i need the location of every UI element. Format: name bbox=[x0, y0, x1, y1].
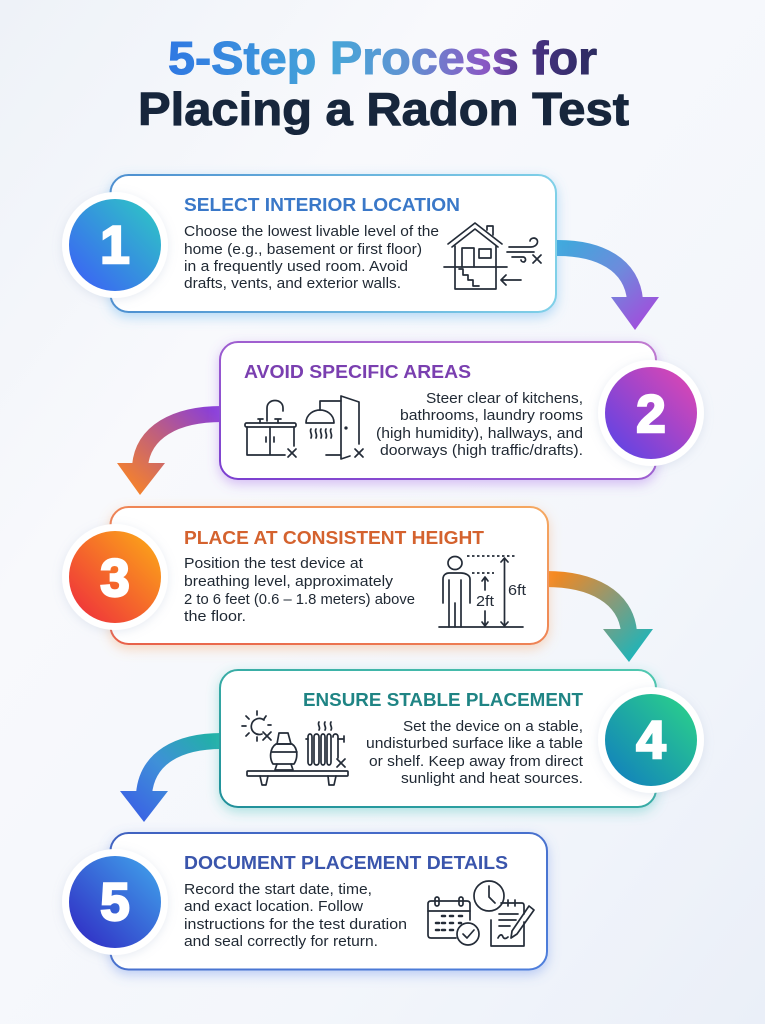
heading: avoid specific areas: AVOID SPECIFIC AREAS bbox=[244, 361, 471, 382]
text: step 1 description: drafts, vents, and exterior walls. bbox=[184, 275, 401, 292]
heading: place at consistent height: PLACE AT CONSISTENT HEIGHT bbox=[184, 527, 485, 548]
panel: step 3 bbox=[62, 507, 548, 644]
title: Placing a Radon Test bbox=[138, 83, 629, 135]
title: 5-Step Process for bbox=[168, 32, 597, 84]
text: step 1 description bbox=[184, 223, 439, 292]
text: step 1 description: in a frequently used room. Avoid bbox=[184, 258, 408, 275]
text: step 4 description: undisturbed surface like a table bbox=[366, 735, 583, 752]
text: step 5 description: instructions for the test duration bbox=[184, 916, 407, 933]
icon: calendar, clock and clipboard bbox=[428, 881, 534, 946]
text: step 5 description: and exact location. Follow bbox=[184, 898, 363, 915]
text: step 5 description: and seal correctly for return. bbox=[184, 933, 378, 950]
panel: step 2 bbox=[220, 342, 704, 479]
text: step 2 description: doorways (high traffic/drafts). bbox=[380, 442, 583, 459]
panel: step 4 bbox=[220, 670, 704, 807]
text: step 4 description bbox=[366, 718, 584, 787]
heading: select interior location: SELECT INTERIOR LOCATION bbox=[184, 194, 460, 215]
text: step 4 description: Set the device on a stable, bbox=[403, 718, 583, 735]
number badge 1: 1 bbox=[100, 216, 130, 275]
number badge 3: 3 bbox=[100, 549, 130, 608]
text: step 3 description bbox=[184, 555, 415, 625]
text: step 4 description: or shelf. Keep away from direct bbox=[369, 753, 584, 770]
number badge 5: 5 bbox=[100, 873, 130, 932]
arrow: step 1 to 2 bbox=[554, 248, 659, 330]
text: step 3 description: the floor. bbox=[184, 608, 246, 625]
icon: person with height markers: 2ft bbox=[476, 594, 494, 610]
number badge 2 bbox=[598, 360, 704, 466]
arrow: step 3 to 4 bbox=[546, 579, 653, 662]
number badge 4: 4 bbox=[636, 711, 666, 770]
icon: person with height markers bbox=[439, 556, 526, 627]
text: step 2 description: (high humidity), hallways, and bbox=[376, 425, 583, 442]
panel: step 5 bbox=[62, 833, 547, 970]
arrow: step 4 to 5 bbox=[120, 741, 222, 822]
text: step 2 description bbox=[376, 390, 583, 459]
text: step 4 description: sunlight and heat sources. bbox=[401, 770, 583, 787]
heading: ensure stable placement: ENSURE STABLE PLACEMENT bbox=[303, 689, 584, 710]
panel: step 1 bbox=[62, 175, 556, 312]
text: step 5 description: Record the start date, time, bbox=[184, 881, 372, 898]
number badge 4 bbox=[598, 687, 704, 793]
text: step 2 description: bathrooms, laundry rooms bbox=[400, 407, 583, 424]
title bbox=[138, 32, 629, 135]
text: step 1 description: home (e.g., basement or first floor) bbox=[184, 241, 422, 258]
number badge 5 bbox=[62, 849, 168, 955]
heading: document placement details: DOCUMENT PLACEMENT DETAILS bbox=[184, 852, 508, 873]
icon: person with height markers: 6ft bbox=[508, 583, 526, 599]
text: step 3 description: 2 to 6 feet (0.6 – 1.8 meters) above bbox=[184, 591, 415, 608]
number badge 1 bbox=[62, 192, 168, 298]
icon: house with basement and drafts bbox=[444, 223, 541, 289]
number badge 3 bbox=[62, 524, 168, 630]
text: step 3 description: breathing level, approximately bbox=[184, 573, 393, 590]
text: step 1 description: Choose the lowest livable level of the bbox=[184, 223, 439, 240]
icon: sink, shower and door bbox=[245, 396, 363, 459]
text: step 3 description: Position the test device at bbox=[184, 555, 364, 572]
text: step 2 description: Steer clear of kitchens, bbox=[426, 390, 583, 407]
icon: device on shelf with sun and radiator bbox=[242, 711, 348, 785]
text: step 5 description bbox=[184, 881, 407, 950]
number badge 2: 2 bbox=[636, 385, 666, 444]
arrow: step 2 to 3 bbox=[117, 414, 222, 495]
